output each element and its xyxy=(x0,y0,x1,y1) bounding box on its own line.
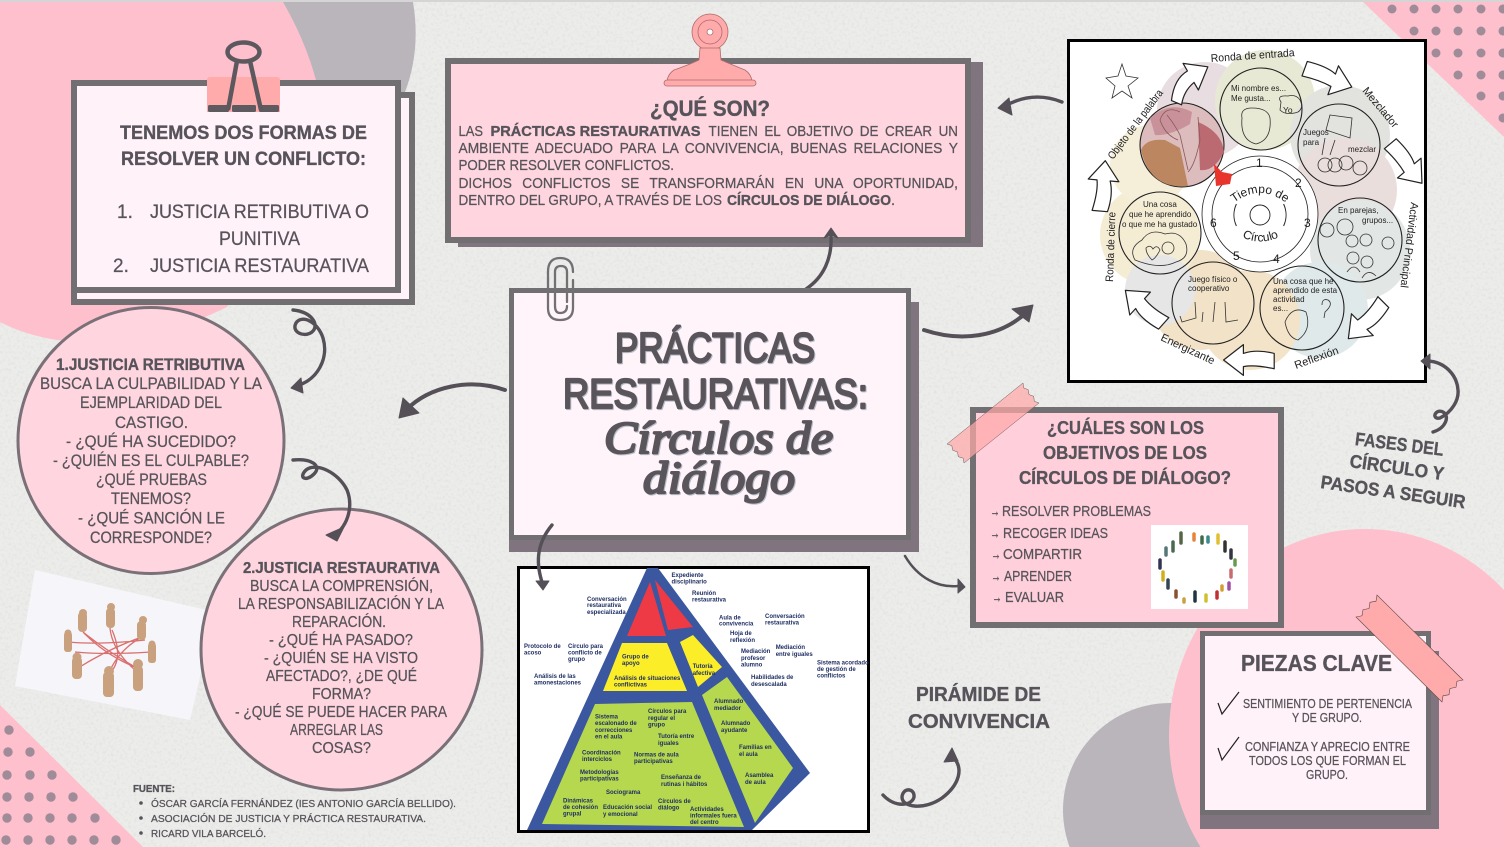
title text: diálogo xyxy=(643,452,795,503)
arrow: conflict box to retributive justice xyxy=(291,310,325,393)
list of objectives: → xyxy=(991,546,1001,563)
panel: retributive justice circle: EJEMPLARIDAD DEL xyxy=(80,394,222,412)
ring numbers and centre label: 5 xyxy=(1233,249,1240,263)
phase circle captions: Yo xyxy=(1283,105,1293,115)
pyramid labels: Sistema acordado xyxy=(817,660,869,666)
phase circle captions: o que me ha gustado xyxy=(1122,220,1198,229)
panel: restorative justice circle: ARREGLAR LAS xyxy=(290,722,383,739)
outer block arrows xyxy=(1086,53,1434,375)
ring numbers and centre label xyxy=(1210,156,1311,266)
panel: restorative justice circle xyxy=(201,509,482,790)
pyramid labels: Grupo de xyxy=(622,654,649,660)
pyramid labels: disciplinario xyxy=(672,580,707,586)
phase circle captions: cooperativo xyxy=(1188,284,1230,293)
panel: retributive justice circle: 1.JUSTICIA RETRIBUTIVA xyxy=(56,356,245,374)
pyramid labels: Enseñanza de xyxy=(661,775,702,781)
pyramid labels: Conversación xyxy=(765,614,805,620)
outer phase labels: Reflexión xyxy=(1293,345,1340,372)
pyramid labels: del centro xyxy=(690,820,719,826)
numbered list: JUSTICIA RETRIBUTIVA O xyxy=(150,202,369,223)
panel: retributive justice circle: - ¿QUÉ SANCIÓN LE xyxy=(78,508,225,528)
arrow to pyramid label xyxy=(883,748,959,806)
sources list xyxy=(133,783,456,840)
list of objectives: RESOLVER PROBLEMAS xyxy=(1002,503,1151,520)
item one xyxy=(1218,692,1413,725)
heading: CÍRCULOS DE DIÁLOGO? xyxy=(1019,467,1231,488)
panel: retributive justice circle: CASTIGO. xyxy=(115,414,188,432)
body text: . xyxy=(891,193,895,209)
ring numbers and centre label: 3 xyxy=(1304,216,1311,230)
title text: RESTAURATIVAS: xyxy=(563,370,868,417)
body text: LAS xyxy=(458,124,483,140)
pyramid labels: Alumnado xyxy=(721,721,751,727)
ring numbers and centre label: 6 xyxy=(1210,216,1217,230)
panel: retributive justice circle: TENEMOS? xyxy=(111,490,191,508)
phase circle captions: Una cosa que he xyxy=(1273,277,1334,286)
inner ring xyxy=(1202,156,1318,272)
decorative shape: pink dotted triangle bottom left xyxy=(0,705,143,847)
body text: PODER RESOLVER CONFLICTOS. xyxy=(458,158,674,174)
panel: restorative justice circle: REPARACIÓN. xyxy=(292,612,386,631)
pyramid labels: participativas xyxy=(634,759,673,765)
outer phase labels: Actividad Principal xyxy=(1398,202,1420,288)
arrow: label to circle image xyxy=(1421,354,1458,432)
label: pyramid of coexistence xyxy=(908,683,1050,733)
arrow: centre to justice circles xyxy=(399,384,505,418)
thumb circle xyxy=(1140,103,1224,187)
pyramid labels xyxy=(524,573,869,826)
body text: CÍRCULOS DE DIÁLOGO xyxy=(727,192,891,209)
pyramid labels: informales fuera xyxy=(690,814,737,820)
heading: ¿CUÁLES SON LOS xyxy=(1047,417,1204,438)
pyramid labels: Tutoría xyxy=(693,664,713,670)
pyramid labels: Círculos para xyxy=(648,709,687,715)
pyramid labels: amonestaciones xyxy=(534,680,582,686)
panel: restorative justice circle: FORMA? xyxy=(312,686,371,703)
photo: ring of miniature people xyxy=(1151,525,1248,609)
pyramid labels: correcciones xyxy=(595,728,633,734)
pyramid labels: Círculos de xyxy=(658,799,691,805)
pyramid labels: grupo xyxy=(568,657,585,663)
pyramid labels: ayudante xyxy=(721,728,748,734)
panel: restorative justice circle: AFECTADO?, ¿DE QUÉ xyxy=(266,666,417,685)
panel: two ways of resolving a conflict xyxy=(74,42,412,302)
phase circle captions: Me gusta... xyxy=(1231,94,1271,103)
pyramid labels: Habilidades de xyxy=(751,675,794,681)
item one: Y DE GRUPO. xyxy=(1292,711,1362,725)
decorative shape: pink dotted triangle top right xyxy=(1363,2,1504,137)
pyramid labels: Normas de aula xyxy=(634,752,679,758)
pyramid labels: Alumnado xyxy=(714,699,744,705)
pyramid labels: Mediación xyxy=(776,645,805,651)
outer phase labels: Ronda de cierre xyxy=(1104,212,1118,282)
decorative shape: pink blob top left xyxy=(0,2,320,342)
pyramid labels: especializada xyxy=(587,610,626,616)
pyramid labels: restaurativa xyxy=(587,603,622,609)
panel: restorative justice circle: LA RESPONSABILIZACIÓN Y LA xyxy=(238,594,444,613)
pyramid labels: Asamblea xyxy=(745,773,774,779)
pyramid labels: Aula de xyxy=(719,616,741,622)
arrow: centre to circle image xyxy=(924,305,1033,336)
item two: CONFIANZA Y APRECIO ENTRE xyxy=(1245,740,1410,754)
panel: what are they xyxy=(448,14,983,247)
heading: PIEZAS CLAVE xyxy=(1241,650,1392,676)
phase circle captions: En parejas, xyxy=(1338,206,1378,215)
phase circle captions: Una cosa xyxy=(1143,200,1177,209)
outer phase labels xyxy=(1104,47,1420,372)
phase circle captions: Juego físico o xyxy=(1188,275,1238,284)
pyramid labels: Actividades xyxy=(690,807,724,813)
item two xyxy=(1218,737,1410,782)
list of objectives: COMPARTIR xyxy=(1003,546,1082,563)
phase circle captions: que he aprendido xyxy=(1129,210,1192,219)
icon: binder clip xyxy=(207,42,280,112)
heading: OBJETIVOS DE LOS xyxy=(1043,442,1207,463)
sources list: ÓSCAR GARCÍA FERNÁNDEZ (IES ANTONIO GARCÍA BELLIDO). xyxy=(151,797,456,810)
phase circle captions: aprendido de esta xyxy=(1273,286,1338,295)
pyramid labels: mediador xyxy=(714,706,742,712)
heading xyxy=(120,122,367,170)
panel: key pieces xyxy=(1200,595,1463,829)
sources list: FUENTE: xyxy=(133,783,175,795)
pyramid labels: restaurativa xyxy=(692,598,727,604)
arrow: centre to what are they xyxy=(806,228,838,289)
list of objectives: RECOGER IDEAS xyxy=(1003,525,1108,542)
pyramid labels: afectiva xyxy=(693,671,716,677)
arrow: centre to pyramid xyxy=(536,525,552,590)
pyramid labels: interciclos xyxy=(582,757,613,763)
pyramid labels: profesor xyxy=(741,656,766,662)
phase circle captions xyxy=(1122,84,1393,313)
decorative shape: grey blob top left xyxy=(283,2,416,110)
arrow: circle image to what are they xyxy=(998,97,1062,115)
phase circle captions: grupos... xyxy=(1362,216,1393,225)
pyramid labels: y emocional xyxy=(603,812,638,818)
icon: paperclip xyxy=(548,258,573,320)
item two: TODOS LOS QUE FORMAN EL xyxy=(1249,754,1406,768)
pyramid labels: iguales xyxy=(658,741,679,747)
pyramid labels: Análisis de las xyxy=(534,674,576,680)
phase circle captions: para xyxy=(1303,138,1320,147)
chart: pyramid of coexistence xyxy=(518,568,869,832)
panel: retributive justice circle: - ¿QUIÉN ES EL CULPABLE? xyxy=(53,451,249,470)
outer phase labels: Objeto de la palabra xyxy=(1106,87,1166,162)
body text: PRÁCTICAS RESTAURATIVAS xyxy=(490,123,701,140)
pyramid labels: Sociograma xyxy=(606,790,641,796)
panel: retributive justice circle: - ¿QUÉ HA SUCEDIDO? xyxy=(66,432,236,451)
pyramid labels: Mediación xyxy=(741,649,771,655)
pyramid labels: en el aula xyxy=(595,734,623,740)
label: phases of the circle xyxy=(1319,428,1467,512)
pyramid labels: Coordinación xyxy=(582,750,621,756)
pyramid labels: diálogo xyxy=(658,806,680,812)
pyramid labels: Expediente xyxy=(672,573,704,579)
numbered list: 1. xyxy=(117,202,133,223)
list of objectives: EVALUAR xyxy=(1005,589,1064,606)
numbered list: PUNITIVA xyxy=(219,229,300,250)
outer phase labels: Ronda de entrada xyxy=(1210,47,1296,65)
icon: pink clip xyxy=(664,14,756,86)
pyramid labels: grupo xyxy=(648,722,665,728)
label: pyramid of coexistence: PIRÁMIDE DE xyxy=(916,683,1041,706)
heading: ¿QUÉ SON? xyxy=(650,96,770,121)
pyramid labels: el aula xyxy=(739,752,758,758)
pyramid labels: Tutoría entre xyxy=(658,734,695,740)
pyramid labels: Conversación xyxy=(587,597,627,603)
pyramid labels: Protocolo de xyxy=(524,644,561,650)
title text xyxy=(563,324,868,503)
heading: RESOLVER UN CONFLICTO: xyxy=(121,148,366,170)
pyramid labels: convivencia xyxy=(719,622,754,628)
outer phase labels: Energizante xyxy=(1159,332,1216,367)
list of objectives: APRENDER xyxy=(1004,568,1072,585)
pyramid labels: entre iguales xyxy=(776,652,813,658)
pyramid labels: Metodologías xyxy=(580,770,619,776)
pyramid labels: Círculo para xyxy=(568,644,604,650)
body text xyxy=(458,123,958,209)
panel: retributive justice circle: ¿QUÉ PRUEBAS xyxy=(96,470,207,489)
pyramid labels: rutinas i hábitos xyxy=(661,782,708,788)
ring numbers and centre label: Tiempo de xyxy=(1230,186,1288,202)
body text: AMBIENTE ADECUADO PARA LA CONVIVENCIA, BUENAS RELACIONES Y xyxy=(458,141,958,157)
pyramid labels: Sistema xyxy=(595,714,619,720)
sources list: RICARD VILA BARCELÓ. xyxy=(151,827,266,840)
pyramid labels: Dinámicas xyxy=(563,798,594,804)
numbered list xyxy=(113,202,369,277)
panel: objectives of the dialogue circles xyxy=(947,383,1281,625)
pyramid labels: Hoja de xyxy=(730,631,752,637)
list of objectives: → xyxy=(990,525,1000,542)
label: phases of the circle: FASES DEL xyxy=(1354,428,1445,460)
decorative shape: pink circle bottom right xyxy=(1169,529,1504,847)
photo: wooden figures joined by red threads xyxy=(15,570,215,720)
pyramid labels: restaurativa xyxy=(765,620,800,626)
numbered list: JUSTICIA RESTAURATIVA xyxy=(150,256,369,277)
ring numbers and centre label: 4 xyxy=(1273,252,1280,266)
label: pyramid of coexistence: CONVIVENCIA xyxy=(908,711,1050,733)
decoration: translucent tape xyxy=(947,383,1039,463)
list of objectives xyxy=(990,503,1151,606)
sketches xyxy=(1106,64,1394,340)
pyramid labels: escalonado de xyxy=(595,721,637,727)
outer phase labels: Mezclador xyxy=(1360,85,1401,131)
pyramid labels: Reunión xyxy=(692,591,716,597)
pyramid labels: desescalada xyxy=(751,682,787,688)
pyramid labels: alumno xyxy=(741,662,763,668)
panel: restorative justice circle: BUSCA LA COMPRENSIÓN, xyxy=(250,576,433,595)
panel: restorative justice circle: - ¿QUIÉN SE HA VISTO xyxy=(264,648,418,667)
panel: retributive justice circle: BUSCA LA CULPABILIDAD Y LA xyxy=(40,375,262,393)
phase circle captions: es... xyxy=(1273,304,1288,313)
label: phases of the circle: CÍRCULO Y xyxy=(1348,450,1446,484)
list of objectives: → xyxy=(991,568,1001,585)
body text: DICHOS CONFLICTOS SE TRANSFORMARÁN EN UNA OPORTUNIDAD, xyxy=(458,175,958,192)
pyramid labels: Análisis de situaciones xyxy=(614,676,681,682)
pyramid labels: conflicto de xyxy=(568,650,602,656)
panel: retributive justice circle: CORRESPONDE? xyxy=(90,529,212,547)
ring numbers and centre label: 1 xyxy=(1256,156,1263,170)
body text: TIENEN EL OBJETIVO DE CREAR UN xyxy=(708,124,958,140)
phase circles xyxy=(1119,68,1402,350)
panel: retributive justice circle xyxy=(18,308,284,574)
pyramid shape xyxy=(527,568,810,830)
numbered list: 2. xyxy=(113,256,129,277)
heading xyxy=(1019,417,1231,488)
arrow: centre to objectives xyxy=(905,556,965,593)
panel: restorative justice circle: - ¿QUÉ SE PUEDE HACER PARA xyxy=(235,702,447,721)
phase circle captions: Juegos xyxy=(1303,128,1329,137)
image: phases of the dialogue circle xyxy=(1067,39,1427,383)
pyramid labels: conflictos xyxy=(817,674,846,680)
panel: restorative justice circle: - ¿QUÉ HA PASADO? xyxy=(269,630,413,649)
watercolor blobs xyxy=(1100,50,1410,370)
pyramid labels: acoso xyxy=(524,650,542,656)
phase circle captions: Mi nombre es... xyxy=(1231,84,1286,93)
pyramid labels: participativas xyxy=(580,776,619,782)
pyramid labels: apoyo xyxy=(622,661,640,667)
phase circle captions: mezclar xyxy=(1348,145,1376,154)
panel: restorative justice circle: 2.JUSTICIA RESTAURATIVA xyxy=(243,560,440,577)
pyramid labels: de aula xyxy=(745,780,766,786)
phase circle captions: actividad xyxy=(1273,295,1305,304)
decorative shape: grey circle bottom right xyxy=(1063,703,1277,847)
pyramid labels: grupal xyxy=(563,812,582,818)
sources list: ASOCIACIÓN DE JUSTICIA Y PRÁCTICA RESTAURATIVA. xyxy=(151,812,426,825)
body text: DENTRO DEL GRUPO, A TRAVÉS DE LOS xyxy=(458,192,722,209)
panel: restorative justice circle: COSAS? xyxy=(312,740,371,757)
pyramid labels: Educación social xyxy=(603,805,652,811)
list of objectives: → xyxy=(990,503,1000,520)
pyramid labels: de cohesión xyxy=(563,805,598,811)
label: phases of the circle: PASOS A SEGUIR xyxy=(1319,471,1467,512)
item two: GRUPO. xyxy=(1306,768,1348,782)
list of objectives: → xyxy=(992,589,1002,606)
panel: main title xyxy=(509,258,919,552)
pyramid labels: conflictivas xyxy=(614,682,648,688)
arrow: retributive to restorative justice xyxy=(293,460,350,541)
title text: PRÁCTICAS xyxy=(615,324,815,371)
decoration: tape xyxy=(1356,595,1463,702)
item one: SENTIMIENTO DE PERTENENCIA xyxy=(1243,697,1413,711)
ring numbers and centre label: 2 xyxy=(1295,176,1302,190)
ring numbers and centre label: Círculo xyxy=(1244,230,1278,242)
pyramid labels: de gestión de xyxy=(817,667,856,673)
title text: Círculos de xyxy=(604,412,833,463)
heading: TENEMOS DOS FORMAS DE xyxy=(120,122,367,144)
pyramid labels: Familias en xyxy=(739,745,772,751)
pyramid labels: regular el xyxy=(648,716,675,722)
pyramid labels: reflexión xyxy=(730,638,755,644)
